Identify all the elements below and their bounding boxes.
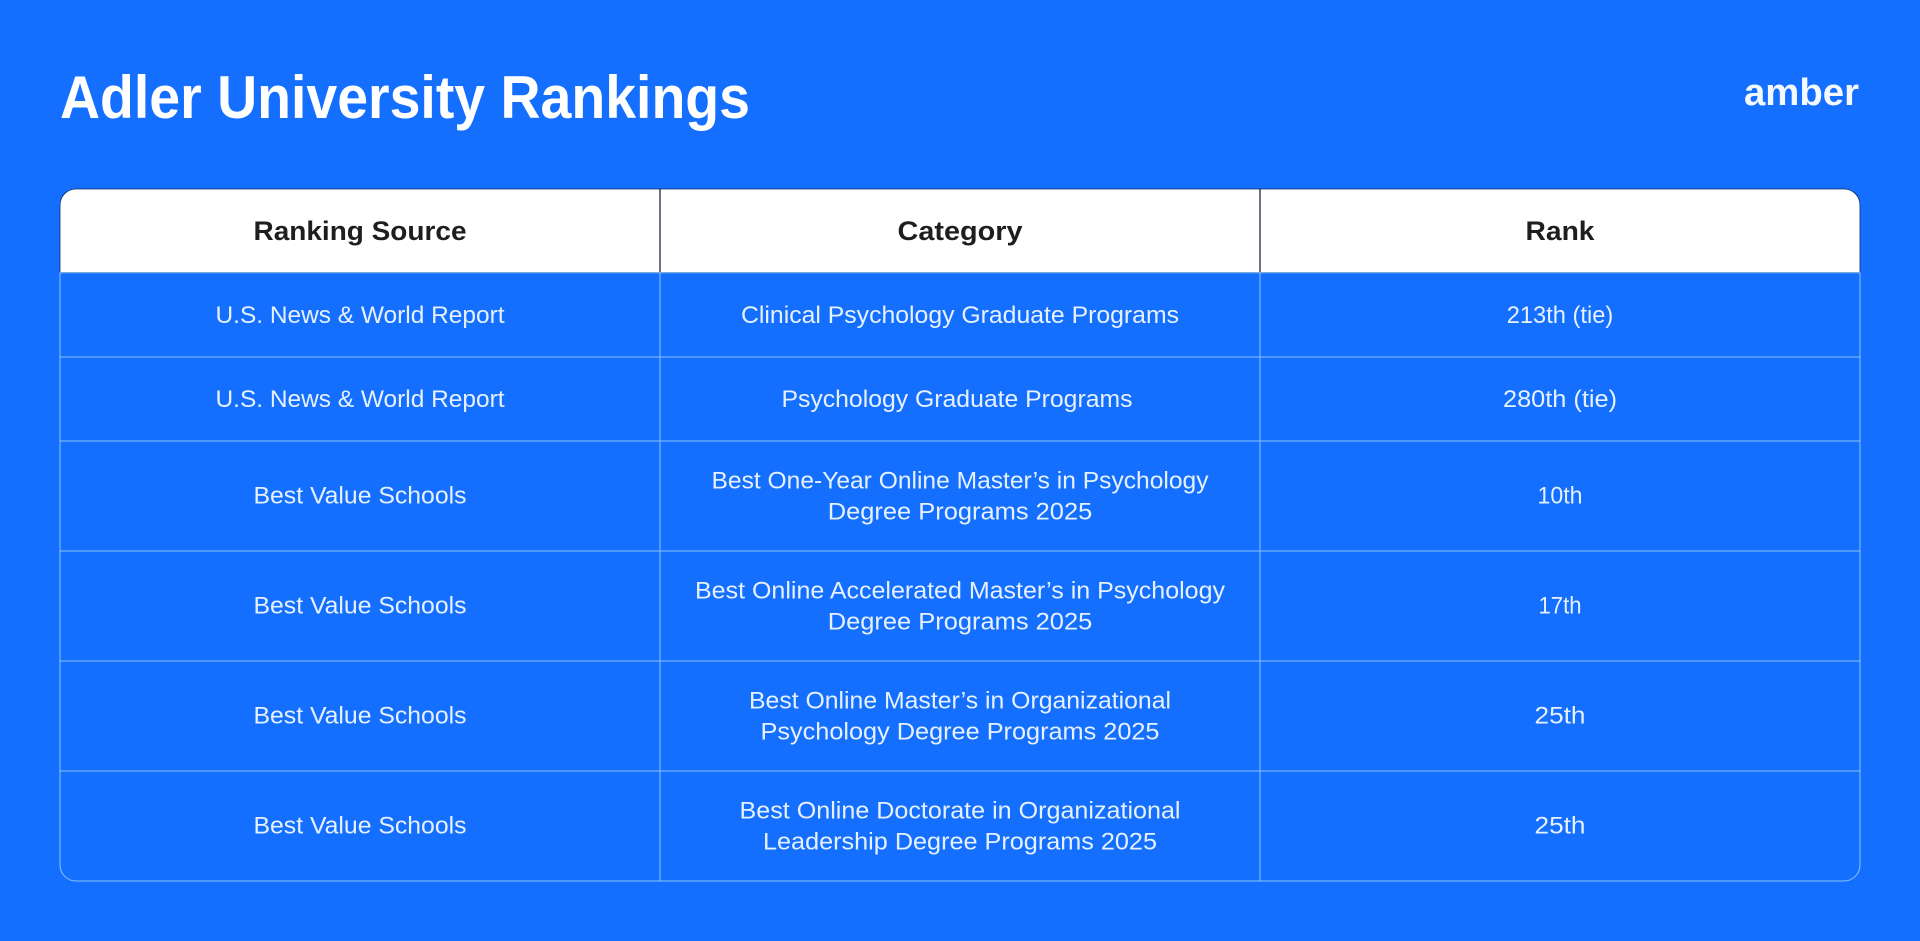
- row 5: Best Online Master’s in Organizational: [749, 688, 1171, 714]
- row 6: [254, 798, 1586, 856]
- row 6: Best Online Doctorate in Organizational: [740, 798, 1180, 824]
- row 5: Psychology Degree Programs 2025: [760, 718, 1160, 746]
- row 1: 213th (tie): [1507, 302, 1613, 329]
- header: rank: Rank: [1526, 216, 1596, 246]
- row 4: Degree Programs 2025: [828, 608, 1092, 636]
- row 3: 10th: [1538, 482, 1582, 510]
- row 4: Best Value Schools: [254, 592, 466, 620]
- row 2: U.S. News & World Report: [216, 386, 505, 413]
- row 5: 25th: [1534, 702, 1586, 730]
- row 3: Degree Programs 2025: [828, 498, 1092, 526]
- logo: amber: amber: [1744, 72, 1859, 114]
- row 2: 280th (tie): [1503, 386, 1617, 413]
- row 6: Best Value Schools: [254, 812, 466, 840]
- header: category: Category: [898, 216, 1022, 246]
- row 4: [254, 578, 1582, 636]
- header: ranking source: Ranking Source: [254, 216, 466, 246]
- row 1: Clinical Psychology Graduate Programs: [741, 302, 1179, 329]
- row 6: Leadership Degree Programs 2025: [763, 828, 1157, 856]
- table header row: [60, 189, 1860, 272]
- row 2: Psychology Graduate Programs: [782, 386, 1132, 413]
- row 3: Best One-Year Online Master’s in Psychology: [712, 468, 1208, 494]
- row 4: Best Online Accelerated Master’s in Psychology: [695, 578, 1225, 604]
- row 6: 25th: [1534, 812, 1586, 840]
- row 5: Best Value Schools: [254, 702, 466, 730]
- row 1: [216, 302, 1613, 329]
- row 5: [254, 688, 1586, 746]
- row 1: U.S. News & World Report: [216, 302, 505, 329]
- row 3: [254, 468, 1582, 526]
- row 3: Best Value Schools: [254, 482, 466, 510]
- rankings table: [60, 189, 1860, 881]
- title: Adler University Rankings: [60, 64, 750, 131]
- row 2: [216, 386, 1617, 413]
- row 4: 17th: [1538, 592, 1582, 620]
